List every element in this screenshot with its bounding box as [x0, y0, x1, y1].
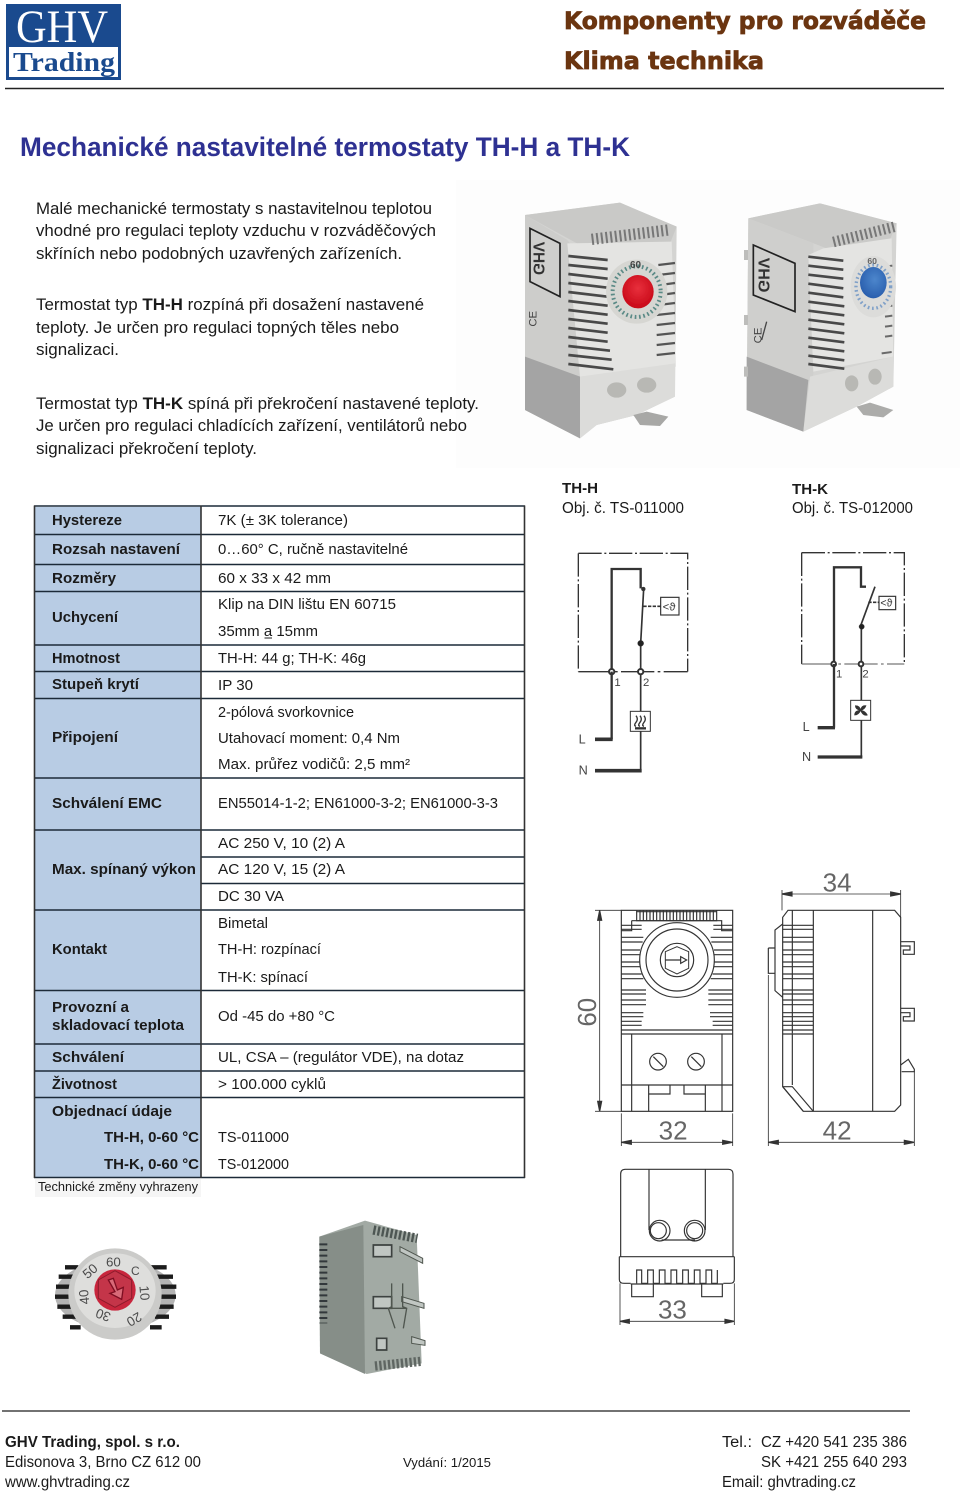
photo: dial close-up: 30	[94, 1305, 113, 1325]
photo: dial close-up	[55, 1248, 176, 1340]
wiring diagram: TH-H: <ϑ	[663, 601, 676, 613]
dimension drawing: front view: 32	[659, 1115, 688, 1145]
table values: EN55014-1-2; EN61000-3-2; EN61000-3-3	[218, 796, 498, 812]
order numbers above wiring diagrams: TH-H	[562, 480, 598, 497]
header: category titles	[564, 7, 926, 75]
footer: contacts: Tel.:	[722, 1434, 752, 1451]
logo: GHV Trading: Trading	[13, 47, 116, 77]
wiring diagram: TH-K	[802, 553, 904, 764]
footnote: technical changes: Technické změny vyhrazeny	[38, 1179, 198, 1194]
table values: Max. průřez vodičů: 2,5 mm²	[218, 757, 410, 773]
table values: 7K (± 3K tolerance)	[218, 513, 348, 529]
intro text block	[36, 199, 479, 458]
table labels: Životnost	[52, 1075, 117, 1093]
photo: dial close-up: 60	[106, 1255, 121, 1270]
intro text block: vhodné pro regulaci teploty vzduchu v rozváděčových	[36, 221, 436, 240]
table values: UL, CSA – (regulátor VDE), na dotaz	[218, 1050, 464, 1066]
table values: TH-K: spínací	[218, 970, 308, 986]
table values: Od -45 do +80 °C	[218, 1009, 335, 1025]
table values: Utahovací moment: 0,4 Nm	[218, 731, 400, 747]
footer: contacts: CZ +420 541 235 386	[761, 1434, 907, 1451]
table labels: TH-H, 0-60 °C	[104, 1130, 199, 1146]
wiring diagram: TH-H: 1	[614, 677, 621, 689]
footer: contacts: SK +421 255 640 293	[761, 1454, 907, 1471]
table values: 0…60° C, ručně nastavitelné	[218, 542, 408, 558]
dimension drawing: front view	[572, 910, 733, 1146]
header: category titles: Komponenty pro rozváděče	[564, 7, 926, 35]
table values: AC 120 V, 15 (2) A	[218, 862, 345, 878]
table labels: Rozměry	[52, 571, 117, 587]
wiring diagram: TH-H	[578, 553, 688, 778]
intro text block: signalizaci.	[36, 340, 119, 359]
table labels: Rozsah nastavení	[52, 542, 181, 558]
table labels: Hystereze	[52, 513, 122, 529]
table values: DC 30 VA	[218, 889, 284, 905]
table labels: Uchycení	[52, 610, 119, 626]
order numbers above wiring diagrams: Obj. č. TS-011000	[562, 500, 684, 517]
photo: TH-H thermostat with red dial	[525, 203, 677, 438]
photo: dial close-up: 20	[124, 1309, 144, 1329]
photo: dial close-up: 50	[80, 1261, 101, 1282]
photo: dial close-up: 10	[136, 1285, 153, 1301]
footer: contacts	[722, 1434, 907, 1491]
intro text block: Malé mechanické termostaty s nastavitelnou teplotou	[36, 199, 432, 218]
table labels: Připojení	[52, 730, 119, 746]
specification table	[34, 506, 525, 1178]
table values: > 100.000 cyklů	[218, 1077, 326, 1093]
table labels: Stupeň krytí	[52, 677, 140, 693]
table labels: Provozní a	[52, 1000, 130, 1016]
intro text block: Je určen pro regulaci chladících zařízení, ventilátorů nebo	[36, 416, 467, 435]
photo: TH-K thermostat with blue dial: GHV	[754, 257, 771, 292]
table labels: TH-K, 0-60 °C	[104, 1157, 199, 1173]
table values	[218, 513, 498, 1173]
photo: TH-H thermostat with red dial: GHV	[529, 241, 546, 275]
footer: company address	[4, 1434, 201, 1491]
table label column background	[35, 507, 201, 1178]
dimension drawing: side view: 42	[823, 1115, 852, 1145]
table labels: Objednací údaje	[52, 1104, 172, 1120]
photo: rear view with DIN clips	[319, 1221, 425, 1374]
table values: TH-H: 44 g; TH-K: 46g	[218, 651, 366, 667]
table values: IP 30	[218, 678, 253, 694]
header: category titles: Klima technika	[564, 47, 764, 75]
table labels: Hmotnost	[52, 651, 120, 667]
table labels: Schválení EMC	[52, 796, 162, 812]
wiring diagram: TH-K: 1	[836, 669, 842, 681]
photo: TH-H thermostat with red dial: 60	[630, 260, 642, 271]
dimension drawing: front view: 60	[572, 998, 602, 1027]
dimension drawing: side view	[768, 868, 914, 1146]
intro text block: skříních nebo podobných uzavřených zařízeních.	[36, 244, 402, 263]
footer: company address: Edisonova 3, Brno CZ 612 00	[5, 1454, 201, 1471]
table values: 2-pólová svorkovnice	[218, 705, 354, 721]
wiring diagram: TH-H: N	[579, 764, 588, 778]
footer: issue: Vydání: 1/2015	[403, 1455, 491, 1470]
table values: 35mm a 15mm	[218, 624, 318, 640]
table values: TS-011000	[218, 1130, 289, 1146]
logo: GHV Trading	[6, 1, 121, 80]
footer: company address: www.ghvtrading.cz	[4, 1474, 130, 1491]
wiring diagram: TH-H: 2	[643, 677, 649, 689]
order numbers above wiring diagrams: TH-K	[792, 481, 828, 498]
table labels	[52, 513, 199, 1173]
footer: company address: GHV Trading, spol. s r.o.	[5, 1434, 180, 1451]
wiring diagram: TH-K: 2	[862, 669, 869, 681]
dimension drawing: bottom view	[619, 1169, 734, 1325]
table values: AC 250 V, 10 (2) A	[218, 836, 345, 852]
wiring diagram: TH-H: L	[579, 732, 586, 746]
intro text block: teploty. Je určen pro regulaci topných těles nebo	[36, 318, 399, 337]
wiring diagram: TH-K: <ϑ	[880, 597, 893, 609]
dimension drawing: side view: 34	[823, 868, 852, 898]
photo: dial close-up: 40	[76, 1289, 92, 1305]
photo: dial close-up: C	[131, 1264, 140, 1278]
title: Mechanické nastavitelné termostaty TH-H a TH-K	[20, 132, 630, 162]
intro text block: signalizaci překročení teploty.	[36, 439, 257, 458]
order numbers above wiring diagrams: Obj. č. TS-012000	[792, 500, 913, 517]
wiring diagram: TH-K: N	[802, 750, 811, 764]
table labels: skladovací teplota	[52, 1018, 185, 1034]
dimension drawing: bottom view: 33	[658, 1295, 687, 1325]
photo: TH-H thermostat with red dial: CE	[528, 310, 540, 327]
intro text block: Termostat typ TH-K spíná při překročení nastavené teploty.	[36, 394, 479, 413]
table values: Klip na DIN lištu EN 60715	[218, 597, 396, 613]
table labels: Max. spínaný výkon	[52, 862, 196, 878]
table labels: Schválení	[52, 1050, 125, 1066]
table values: Bimetal	[218, 916, 268, 932]
wiring diagram: TH-K: L	[803, 720, 810, 734]
logo: GHV Trading: GHV	[16, 1, 108, 53]
footer: contacts: Email: ghvtrading.cz	[722, 1474, 856, 1491]
table values: TH-H: rozpínací	[218, 942, 321, 958]
photo: TH-K thermostat with blue dial	[744, 203, 897, 432]
table labels: Kontakt	[52, 942, 107, 958]
table values: 60 x 33 x 42 mm	[218, 571, 331, 587]
table values: TS-012000	[218, 1157, 289, 1173]
product photo: thermostats TH-H and TH-K	[525, 203, 897, 438]
order numbers above wiring diagrams	[562, 480, 913, 517]
intro text block: Termostat typ TH-H rozpíná při dosažení nastavené	[36, 295, 424, 314]
photo: TH-K thermostat with blue dial: 60	[867, 256, 877, 266]
photo: TH-K thermostat with blue dial: CE	[753, 327, 765, 343]
